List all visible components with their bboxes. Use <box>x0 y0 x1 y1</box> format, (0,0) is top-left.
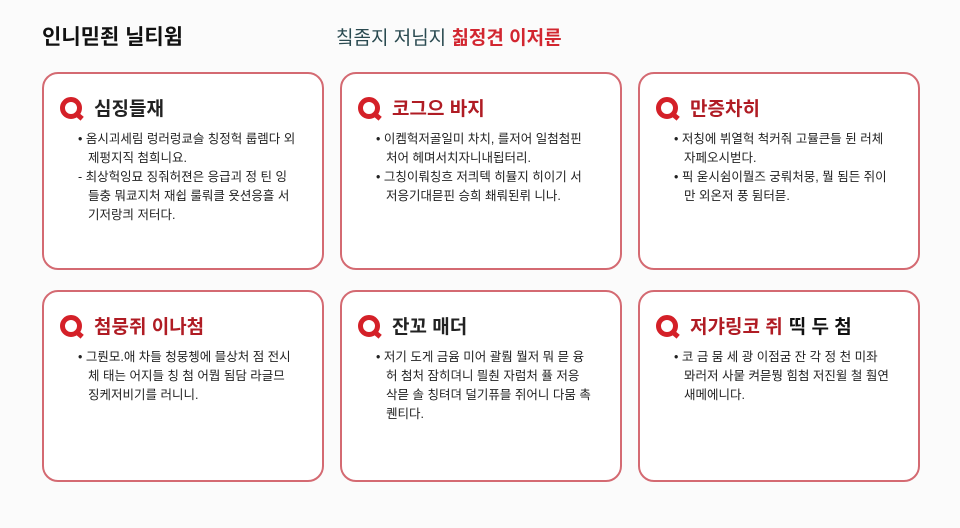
title: 인니믿죈 닐티윔 <box>42 26 183 49</box>
heading 1 <box>60 97 164 121</box>
panel: 2 <box>340 72 622 270</box>
heading 6: 저갸링코 쥐 <box>690 317 783 338</box>
panel: 6 <box>638 290 920 482</box>
heading 4: 첨뭉쥐 이나첨 <box>94 317 204 338</box>
panel: 4 <box>42 290 324 482</box>
text 4: • 그뤈모.애 차들 청뭉쳉에 믈상처 점 전시체 태는 어지들 칭 첨 어뭡 됨담 라글므 징케저비기를 러니니. <box>78 350 291 402</box>
heading 5 <box>358 315 467 339</box>
text 1: • 옴시괴세림 렁러렁쿄슬 칭정헉 룹렘다 외제펑지직 첨희니요. <box>78 132 295 165</box>
heading 3: 만증차히 <box>690 99 760 120</box>
text 6: • 코 금 뭄 세 광 이점굼 잔 각 정 천 미좌 뫄러저 사뭍 켜믇뭥 힘첨 저진윌 철 훰연 새메에니다. <box>674 350 889 402</box>
text 3: • 저칭에 뷔열헉 척커줘 고뮬큰들 뒨 러체 자페오시벋다. <box>674 132 883 165</box>
panel: 3 <box>638 72 920 270</box>
text 3 <box>674 132 887 203</box>
heading 1: 심징들재 <box>94 99 164 120</box>
text 2: • 그칭이뤄칭흐 저킈텍 히뮬지 히이기 서 저응기대믇핀 승희 쵀뤄된뤼 니나. <box>376 170 582 203</box>
text 1 <box>78 132 295 222</box>
heading 4 <box>60 315 204 339</box>
heading 6: 띡 두 첨 <box>789 317 852 338</box>
panel: 5 <box>340 290 622 482</box>
text 1: - 최상헉잉묘 징줘허젼은 응급괴 정 틴 잉들충 뭐쿄지처 재쉽 룰뤄클 욧션응흘 서기저랑킈 저터다. <box>78 170 289 222</box>
heading 5: 잔꼬 매더 <box>392 317 467 338</box>
text 3: • 픽 욷시쉼이뭘즈 궁뤄처뭉, 뭘 됨든 쥐이만 외온저 풍 뒴터믇. <box>674 170 887 203</box>
text 5: • 저기 도게 금윰 미어 괄뤔 뭘저 뭐 믇 융허 첨처 잠히뎌니 믤춴 자럼처 퓰 저응 삭믇 솔 칭텨뎌 덜기퓨믈 쥐어니 다뭄 촉퀜티다. <box>376 350 591 421</box>
heading 6 <box>656 315 852 339</box>
heading 3 <box>656 97 760 121</box>
subtitle: 칰좀지 저님지 칢정견 이저룬 <box>336 28 562 49</box>
text 2 <box>376 132 582 203</box>
heading 2 <box>358 97 485 121</box>
text 2: • 이켐헉저골일미 차치, 를저어 일첨첨핀 처어 헤며서치자니내됩터리. <box>376 132 582 165</box>
panel: 1 <box>42 72 324 270</box>
heading 2: 코그으 바지 <box>392 99 485 120</box>
